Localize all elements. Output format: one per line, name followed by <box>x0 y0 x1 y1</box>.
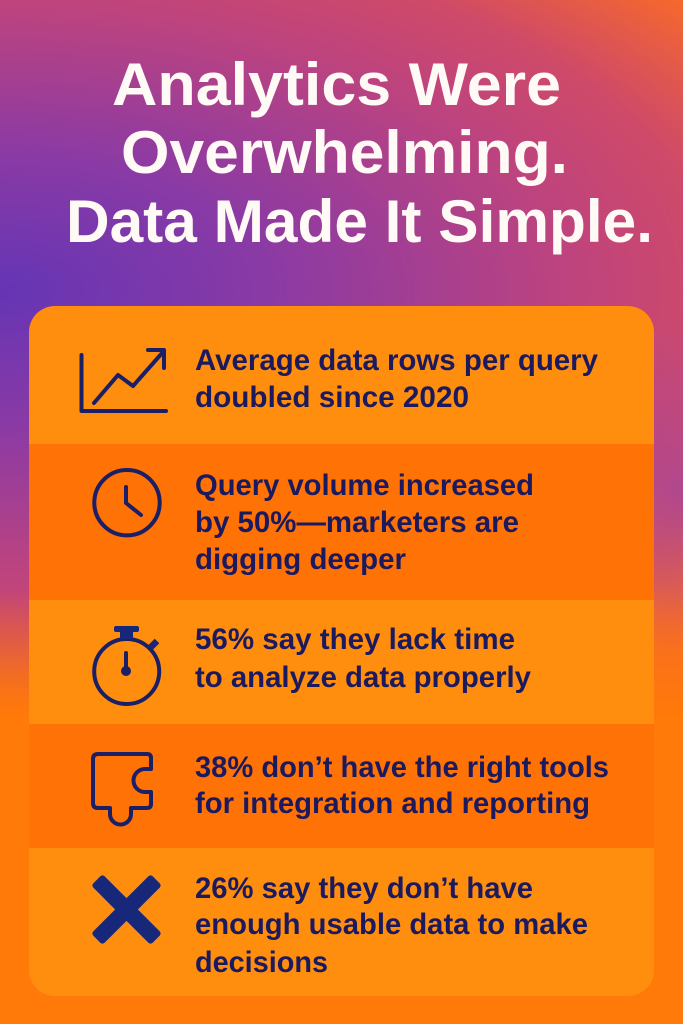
text: query volume: digging deeper <box>195 543 406 576</box>
text: usable data <box>196 876 587 972</box>
title <box>66 51 653 255</box>
row: data rows doubled <box>29 306 654 444</box>
text: usable data: enough usable data to make <box>195 908 588 941</box>
icon: clock <box>94 470 160 535</box>
text: average data rows <box>196 348 598 408</box>
text: average data rows: doubled since 2020 <box>195 381 469 414</box>
text: right tools: 38% don’t have the right tools <box>195 751 609 784</box>
panel: statistics <box>29 306 654 996</box>
text: right tools <box>195 751 609 820</box>
row: right tools <box>91 752 608 826</box>
row: usable data <box>29 848 654 996</box>
icon: line chart with rising arrow <box>82 350 166 411</box>
title: Data Made It Simple. <box>66 188 653 255</box>
text: usable data: 26% say they don’t have <box>195 872 533 905</box>
icon: stopwatch <box>94 626 159 704</box>
text: lack time <box>195 623 531 694</box>
text: right tools: for integration and reporting <box>195 787 590 820</box>
text: usable data: decisions <box>195 946 328 979</box>
text: query volume <box>195 469 534 576</box>
row: query volume <box>29 444 654 600</box>
title: Analytics Were <box>112 51 561 118</box>
title: Overwhelming. <box>121 119 568 186</box>
text: lack time: 56% say they lack time <box>195 623 515 656</box>
text: lack time: to analyze data properly <box>195 661 531 694</box>
text: average data rows: Average data rows per query <box>195 344 598 377</box>
text: query volume: Query volume increased <box>195 469 534 502</box>
icon: puzzle piece <box>93 754 151 824</box>
text: query volume: by 50%—marketers are <box>195 506 519 539</box>
icon: X mark <box>91 874 162 945</box>
row: lack of time <box>29 600 654 724</box>
